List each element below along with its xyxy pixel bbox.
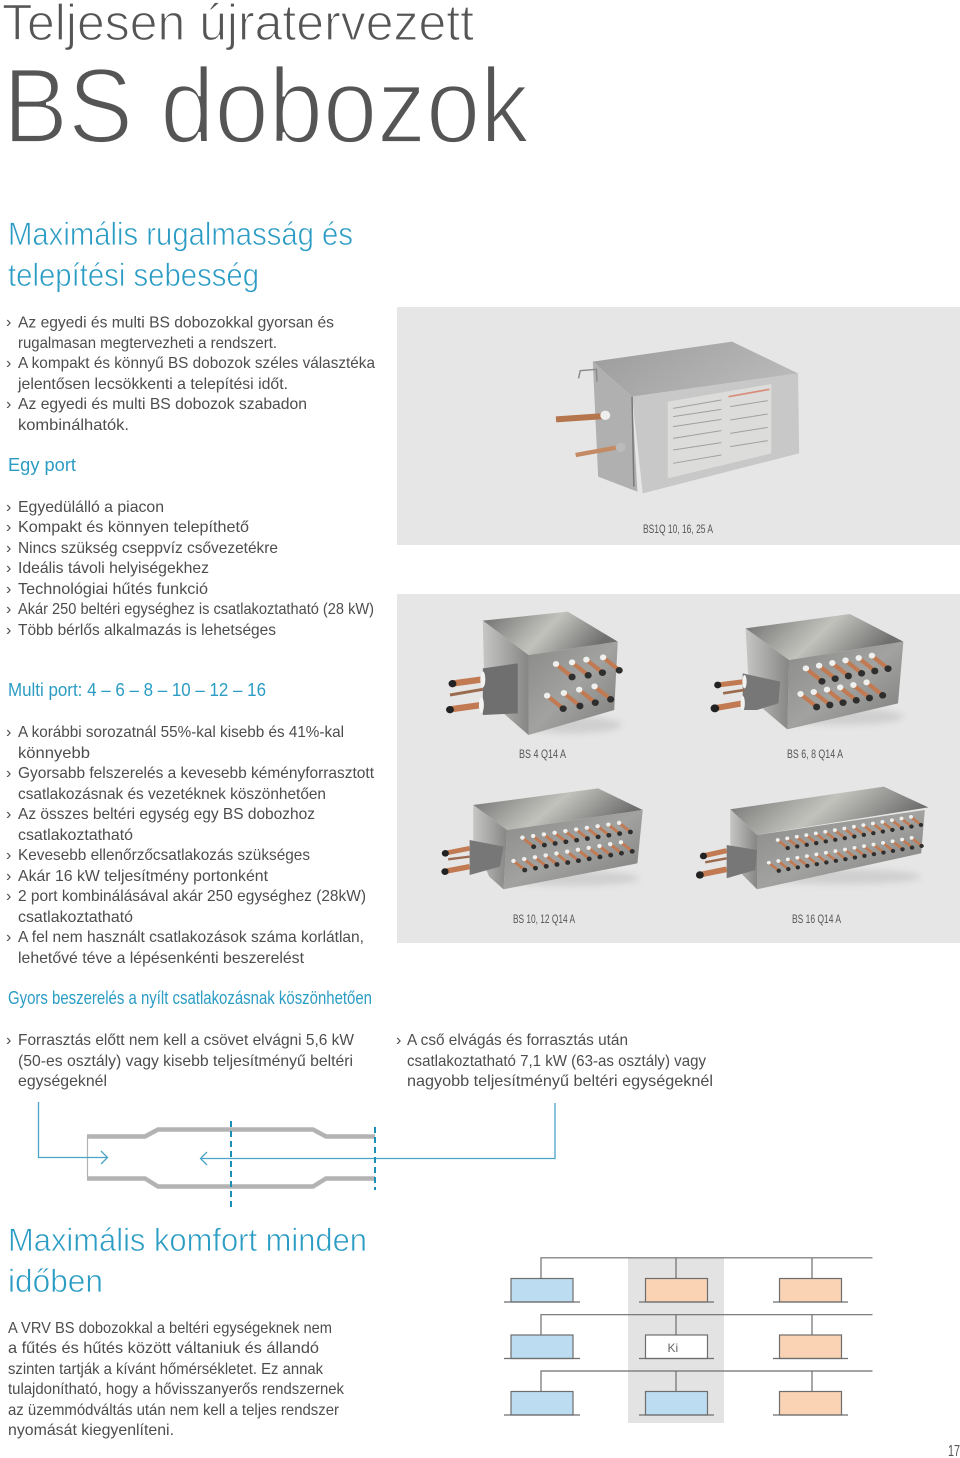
row 3 <box>504 1371 872 1415</box>
text block: multi port list: csatlakozásnak és vezetéknek köszönhetően <box>18 786 326 803</box>
caption: BS 10, 12 Q14 A <box>513 914 575 926</box>
text block: before cutting <box>6 1032 355 1090</box>
title: BS dobozok <box>3 46 529 166</box>
text block: single port list: Egyedülálló a piacon <box>18 499 164 516</box>
text block: single port list: › <box>6 540 11 557</box>
text block: multi port list: lehetővé téve a lépésenkénti beszerelést <box>18 950 305 967</box>
pipe diagram <box>38 1102 555 1210</box>
system diagram <box>504 1258 872 1423</box>
text block: before cutting: egységeknél <box>18 1073 107 1090</box>
text block: intro list: jelentősen lecsökkenti a telepítési időt. <box>17 376 288 393</box>
product photo: BS 10, 12 <box>441 788 643 889</box>
title <box>2 0 529 166</box>
text block: single port list: Akár 250 beltéri egységhez is csatlakoztatható (28 kW) <box>18 601 374 618</box>
text block: multi port list: › <box>6 888 11 905</box>
text block: intro list: Az egyedi és multi BS dobozokkal gyorsan és <box>18 314 334 332</box>
heading: quick installation: Gyors beszerelés a nyílt csatlakozásnak köszönhetően <box>8 988 372 1008</box>
product photo: BS1Q unit <box>556 342 799 493</box>
heading: comfort: Maximális komfort minden <box>8 1222 367 1258</box>
text block: single port list: › <box>6 499 11 516</box>
text block: intro list: kombinálhatók. <box>18 417 129 434</box>
text block: multi port list: A fel nem használt csatlakozások száma korlátlan, <box>18 929 364 946</box>
text block: before cutting: (50-es osztály) vagy kisebb teljesítményű beltéri <box>18 1053 353 1070</box>
text block: after cutting <box>396 1032 713 1090</box>
highlighted column <box>628 1258 724 1423</box>
text block: after cutting: csatlakoztatható 7,1 kW (63-as osztály) vagy <box>407 1053 706 1070</box>
arrow: from right text <box>200 1103 555 1165</box>
cut lines <box>231 1121 375 1210</box>
text block: intro list: › <box>6 314 11 331</box>
text block: intro list: › <box>6 355 11 372</box>
text block: single port list: Nincs szükség cseppvíz csővezetékre <box>18 540 278 557</box>
heading: single port: Egy port <box>8 455 76 475</box>
heading: multi port: Multi port: 4 – 6 – 8 – 10 – 12 – 16 <box>8 680 266 700</box>
text block: single port list: › <box>6 601 11 618</box>
text block: intro list: › <box>6 396 11 413</box>
text block: multi port list: 2 port kombinálásával akár 250 egységhez (28kW) <box>18 888 366 905</box>
text block: multi port list: › <box>6 929 11 946</box>
pipe outline <box>87 1130 375 1186</box>
text block: comfort paragraph: tulajdonítható, hogy a hővisszanyerős rendszernek <box>8 1381 345 1398</box>
panel: multi port units <box>397 594 960 943</box>
text block: before cutting: › <box>6 1032 11 1049</box>
text block: multi port list: csatlakoztatható <box>18 909 133 926</box>
caption: BS 16 Q14 A <box>792 914 841 926</box>
text block: intro list: A kompakt és könnyű BS dobozok széles választéka <box>18 355 375 372</box>
text block: multi port list: csatlakoztatható <box>18 827 133 844</box>
product photo: BS 6, 8 <box>711 614 903 729</box>
text block: after cutting: nagyobb teljesítményű beltéri egységeknél <box>407 1073 713 1090</box>
heading: comfort: időben <box>8 1263 103 1299</box>
text block: after cutting: A cső elvágás és forrasztás után <box>407 1032 628 1049</box>
text block: single port list: Ideális távoli helyiségekhez <box>18 560 209 577</box>
text block: comfort paragraph: A VRV BS dobozokkal a beltéri egységeknek nem <box>8 1320 332 1337</box>
text block: after cutting: › <box>396 1032 401 1049</box>
text block: intro list: Az egyedi és multi BS dobozok szabadon <box>18 396 307 413</box>
text block: intro list: rugalmasan megtervezheti a rendszert. <box>18 335 277 352</box>
text block: single port list <box>6 499 374 639</box>
product photo: BS 16 <box>696 787 928 889</box>
text block: multi port list: › <box>6 847 11 864</box>
caption: BS 4 Q14 A <box>519 749 566 761</box>
text block: multi port list: Akár 16 kW teljesítmény portonként <box>18 868 269 885</box>
text block: single port list: › <box>6 519 11 536</box>
text block: comfort paragraph <box>8 1320 345 1439</box>
text block: multi port list: Kevesebb ellenőrzőcsatlakozás szükséges <box>18 847 310 864</box>
text block: single port list: Több bérlős alkalmazás is lehetséges <box>18 622 276 639</box>
caption: BS1Q 10, 16, 25 A <box>643 524 713 536</box>
arrow: from left text <box>38 1102 108 1164</box>
row 2 <box>504 1315 872 1358</box>
text block: multi port list: › <box>6 724 11 741</box>
text block: multi port list: › <box>6 765 11 782</box>
text block: single port list: › <box>6 622 11 639</box>
text block: multi port list: › <box>6 806 11 823</box>
row 1 <box>504 1258 872 1302</box>
text block: before cutting: Forrasztás előtt nem kell a csövet elvágni 5,6 kW <box>18 1032 355 1049</box>
heading: flexibility: Maximális rugalmasság és <box>8 216 353 252</box>
text block: comfort paragraph: az üzemmódváltás után nem kell a teljes rendszer <box>8 1402 340 1419</box>
text block: single port list: Technológiai hűtés funkció <box>18 581 208 598</box>
text block: single port list: › <box>6 560 11 577</box>
text block: comfort paragraph: szinten tartják a kívánt hőmérsékletet. Ez annak <box>8 1361 324 1378</box>
heading: flexibility: telepítési sebesség <box>8 257 259 293</box>
heading: flexibility <box>8 216 353 293</box>
text block: multi port list: Gyorsabb felszerelés a kevesebb kéményforrasztott <box>18 765 375 782</box>
text block: intro list <box>6 314 375 434</box>
text block: single port list: › <box>6 581 11 598</box>
caption: BS 6, 8 Q14 A <box>787 749 843 761</box>
text block: comfort paragraph: a fűtés és hűtés között váltaniuk és állandó <box>8 1340 319 1357</box>
text block: multi port list: könnyebb <box>18 745 90 762</box>
text block: multi port list <box>6 724 375 967</box>
text block: single port list: Kompakt és könnyen telepíthető <box>18 519 249 536</box>
panel: single port unit <box>397 307 960 545</box>
text block: multi port list: › <box>6 868 11 885</box>
text block: comfort paragraph: nyomását kiegyenlíteni. <box>8 1422 174 1439</box>
product photo: BS 4 <box>446 612 623 735</box>
heading: comfort <box>8 1222 367 1299</box>
text block: multi port list: Az összes beltéri egység egy BS dobozhoz <box>18 806 315 823</box>
text block: multi port list: A korábbi sorozatnál 55%-kal kisebb és 41%-kal <box>18 724 344 741</box>
label: off unit: Ki <box>668 1341 678 1355</box>
